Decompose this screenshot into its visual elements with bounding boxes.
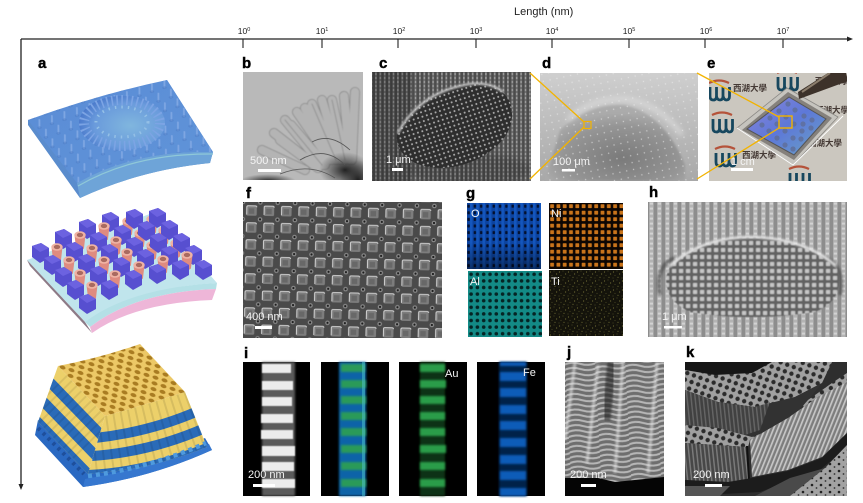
panel label d: d bbox=[542, 55, 551, 72]
panel e: photograph of device bbox=[707, 55, 850, 186]
micrograph b bbox=[243, 72, 363, 180]
panel label b: b bbox=[242, 55, 251, 72]
map Al: Al bbox=[470, 276, 480, 288]
photo e: 西湖大學 bbox=[742, 150, 777, 160]
photo e: 西湖大學 bbox=[733, 83, 768, 93]
scale bar 1 um: 1 μm bbox=[386, 154, 411, 166]
scale bar 400 nm: 400 nm bbox=[246, 311, 283, 323]
axis: length scale: 1 bbox=[325, 27, 328, 33]
panel f: SEM cubes and rings bbox=[243, 185, 442, 338]
panel b: TEM of nanotubes bbox=[240, 55, 376, 200]
axis: length scale: 10 bbox=[393, 26, 402, 36]
panel a: schematics bbox=[27, 55, 217, 487]
device chip bbox=[737, 88, 838, 165]
panel label h: h bbox=[649, 184, 658, 201]
panel label g: g bbox=[466, 185, 475, 202]
zoom callout lines bbox=[530, 73, 792, 179]
panel h: SEM dome side view bbox=[648, 184, 847, 337]
scale bar 200 nm: 200 nm bbox=[570, 469, 607, 481]
panel label j: j bbox=[566, 344, 571, 361]
panel label c: c bbox=[379, 55, 387, 72]
axis: length scale: 10 bbox=[238, 26, 247, 36]
image i: Au map bbox=[399, 362, 467, 496]
image i: Fe map: Fe bbox=[523, 367, 536, 379]
micrograph c bbox=[372, 72, 531, 181]
image i: HAADF bbox=[243, 362, 310, 496]
scale bar 200 nm bbox=[570, 469, 607, 487]
tweezers bbox=[798, 73, 848, 99]
panel label f: f bbox=[246, 185, 252, 202]
axis: length scale: 10 bbox=[777, 26, 786, 36]
photo e bbox=[709, 73, 850, 181]
scale bar 100 um: 100 μm bbox=[553, 156, 590, 168]
image i: overlay bbox=[321, 362, 389, 496]
panel i: EDS line maps bbox=[243, 345, 545, 496]
micrograph d bbox=[540, 73, 698, 181]
scale bar 1 cm: 1 cm bbox=[731, 156, 755, 168]
panel g: elemental maps bbox=[466, 185, 623, 337]
photo e: 西湖大學 bbox=[815, 76, 850, 86]
scale bar 1 um: 1 μm bbox=[662, 311, 687, 323]
image i: HAADF: 200 nm bbox=[248, 469, 285, 481]
photo e: 西湖大學 bbox=[808, 138, 843, 148]
axis: length scale: 2 bbox=[402, 27, 405, 33]
micrograph h bbox=[648, 202, 847, 337]
axis: length scale: 0 bbox=[247, 27, 250, 33]
panel label a: a bbox=[38, 55, 47, 72]
micrograph f bbox=[243, 202, 442, 338]
axis: length scale: 7 bbox=[786, 27, 789, 33]
photo e: 西湖大學 bbox=[815, 105, 850, 115]
axis: length scale: 10 bbox=[316, 26, 325, 36]
micrograph j bbox=[565, 362, 664, 496]
panel label i: i bbox=[244, 345, 248, 362]
axis: length scale: 10 bbox=[546, 26, 555, 36]
axis: length scale: 3 bbox=[479, 27, 482, 33]
schematic: cubes and rings on bilayer bbox=[27, 208, 217, 333]
map Ti bbox=[549, 270, 623, 336]
map Ti: Ti bbox=[551, 276, 560, 288]
panel d: SEM large dome bbox=[540, 55, 698, 181]
schematic: pillared curved sheet with dome bbox=[28, 80, 213, 198]
axis: length scale: 6 bbox=[709, 27, 712, 33]
map O: O bbox=[471, 208, 480, 220]
axis: length scale: 10 bbox=[470, 26, 479, 36]
panel c: SEM dome bbox=[372, 55, 531, 186]
map Ni bbox=[549, 203, 623, 269]
scale bar 200 nm: 200 nm bbox=[693, 469, 730, 481]
axis: length scale: Length (nm) bbox=[514, 6, 573, 18]
scale bar 200 nm bbox=[693, 469, 730, 487]
map Al bbox=[468, 271, 542, 337]
image i: Au map: Au bbox=[445, 368, 458, 380]
scale bar 400 nm bbox=[246, 311, 283, 329]
panel label k: k bbox=[686, 344, 695, 361]
scale bar 500 nm: 500 nm bbox=[250, 155, 287, 167]
scale bar 1 um bbox=[662, 311, 687, 328]
panel k: SEM curved honeycomb arcs bbox=[685, 344, 847, 496]
panel j: SEM multilayer side view bbox=[565, 344, 664, 496]
map Ni: Ni bbox=[551, 208, 561, 220]
axis: length scale: 4 bbox=[555, 27, 558, 33]
axis: length scale: 5 bbox=[632, 27, 635, 33]
axis: length scale: 10 bbox=[623, 26, 632, 36]
image i: Fe map bbox=[477, 362, 545, 496]
schematic: striped honeycomb on curved base bbox=[28, 344, 212, 487]
map O bbox=[467, 203, 541, 269]
panel label e: e bbox=[707, 55, 715, 72]
micrograph k bbox=[685, 362, 847, 496]
axis: length scale: 10 bbox=[700, 26, 709, 36]
